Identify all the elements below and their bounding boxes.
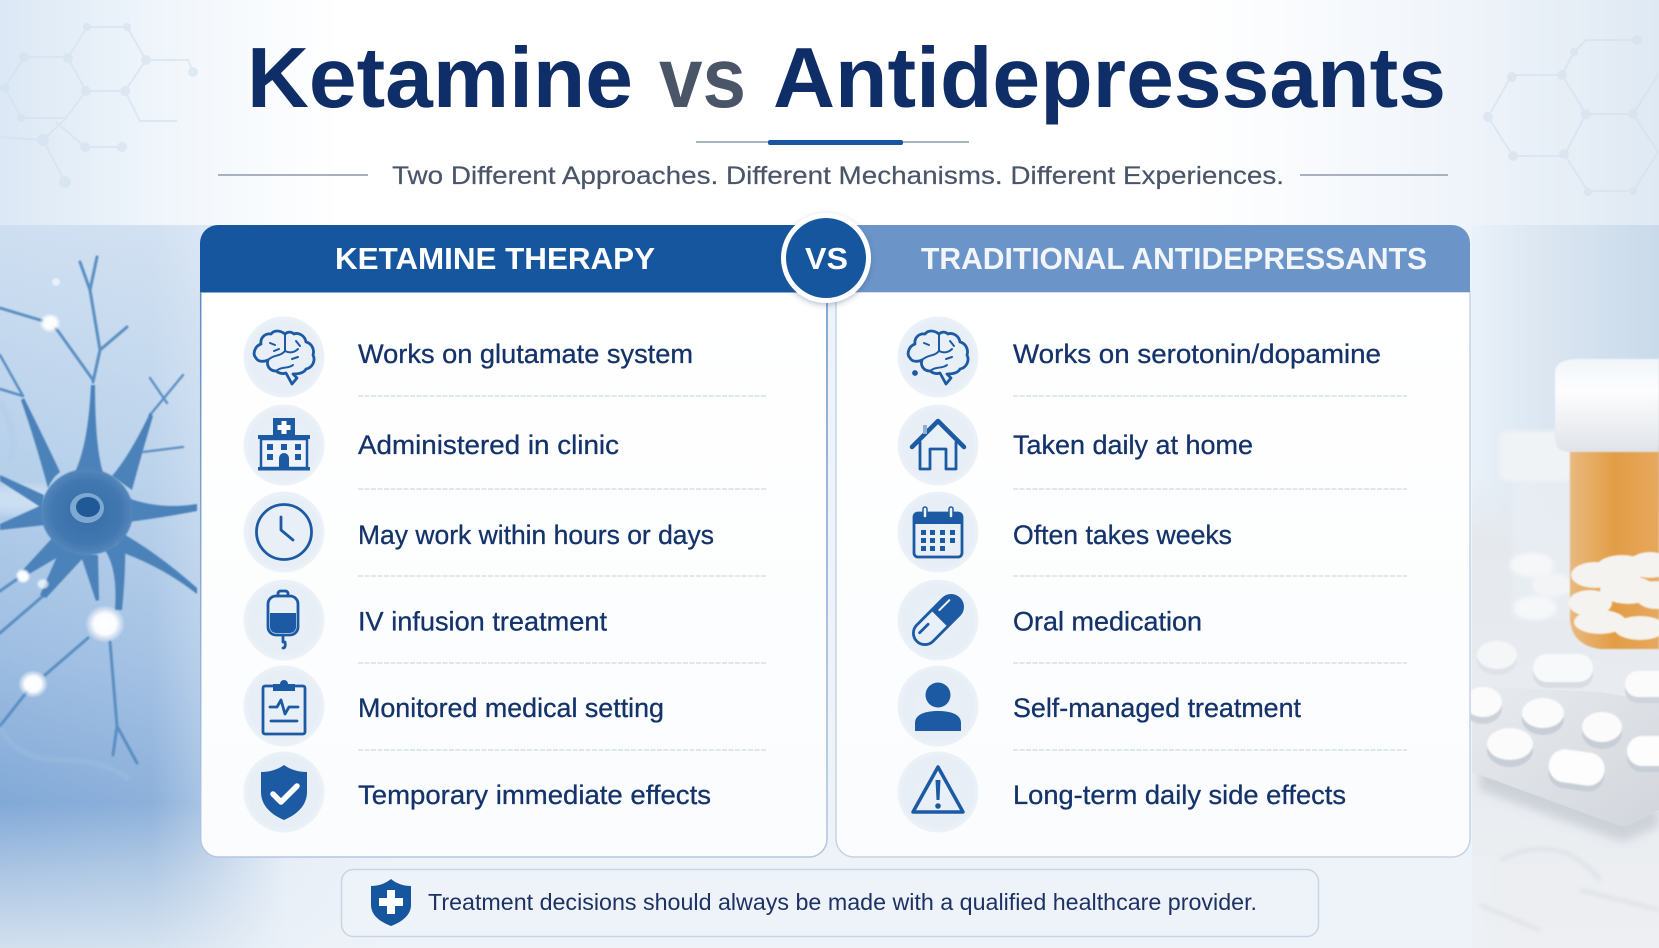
row: clinic <box>244 404 619 486</box>
antidepressants header: TRADITIONAL ANTIDEPRESSANTS <box>921 241 1427 276</box>
ketamine header: KETAMINE THERAPY <box>335 241 655 276</box>
vs badge: VS <box>805 241 848 276</box>
row: glutamate: Works on glutamate system <box>358 339 693 369</box>
panel: ketamine therapy <box>200 225 827 857</box>
row: self-managed: Self-managed treatment <box>1013 693 1302 723</box>
title <box>247 31 1446 126</box>
row: side effects <box>898 752 1346 832</box>
blister pack and pills <box>1464 641 1659 842</box>
title: Ketamine <box>247 31 633 126</box>
row: home <box>898 404 1253 486</box>
molecule pattern: top left <box>0 23 198 188</box>
row: oral medication <box>898 580 1202 660</box>
vs badge <box>781 213 871 303</box>
callout: disclaimer: Treatment decisions should always be made with a qualified healthcare provider. <box>428 889 1257 915</box>
row: oral medication: Oral medication <box>1013 606 1202 636</box>
row: glutamate <box>244 316 693 398</box>
row: temporary effects <box>244 752 711 832</box>
row: monitored <box>244 666 664 746</box>
title underline <box>696 140 969 145</box>
callout: disclaimer <box>342 870 1318 936</box>
subtitle: Two Different Approaches. Different Mechanisms. Different Experiences. <box>392 162 1284 190</box>
neuron photo: left side <box>0 225 400 948</box>
row: monitored: Monitored medical setting <box>358 693 664 723</box>
row: hours or days: May work within hours or days <box>358 520 714 550</box>
row: serotonin: Works on serotonin/dopamine <box>1013 339 1381 369</box>
row: IV infusion: IV infusion treatment <box>358 606 608 636</box>
amber bottle <box>1555 359 1659 649</box>
ketamine header <box>200 225 826 292</box>
title: vs <box>659 31 746 126</box>
back clear bottle <box>1500 431 1572 620</box>
row: home: Taken daily at home <box>1013 430 1253 460</box>
row: side effects: Long-term daily side effects <box>1013 780 1346 810</box>
row: IV infusion <box>244 580 608 660</box>
title: Antidepressants <box>773 31 1446 126</box>
icon: medical shield <box>371 879 411 926</box>
row: hours or days <box>244 492 714 572</box>
molecule pattern: top right <box>1483 35 1658 196</box>
row: temporary effects: Temporary immediate effects <box>358 780 711 810</box>
row: serotonin <box>898 316 1381 398</box>
row: clinic: Administered in clinic <box>358 430 619 460</box>
row: self-managed <box>898 666 1302 746</box>
pill bottles photo: right side <box>1340 225 1659 948</box>
antidepressants header <box>826 225 1470 292</box>
row dividers <box>358 396 1407 750</box>
row: weeks <box>898 492 1232 572</box>
panel: traditional antidepressants <box>826 225 1470 857</box>
row: weeks: Often takes weeks <box>1013 520 1232 550</box>
